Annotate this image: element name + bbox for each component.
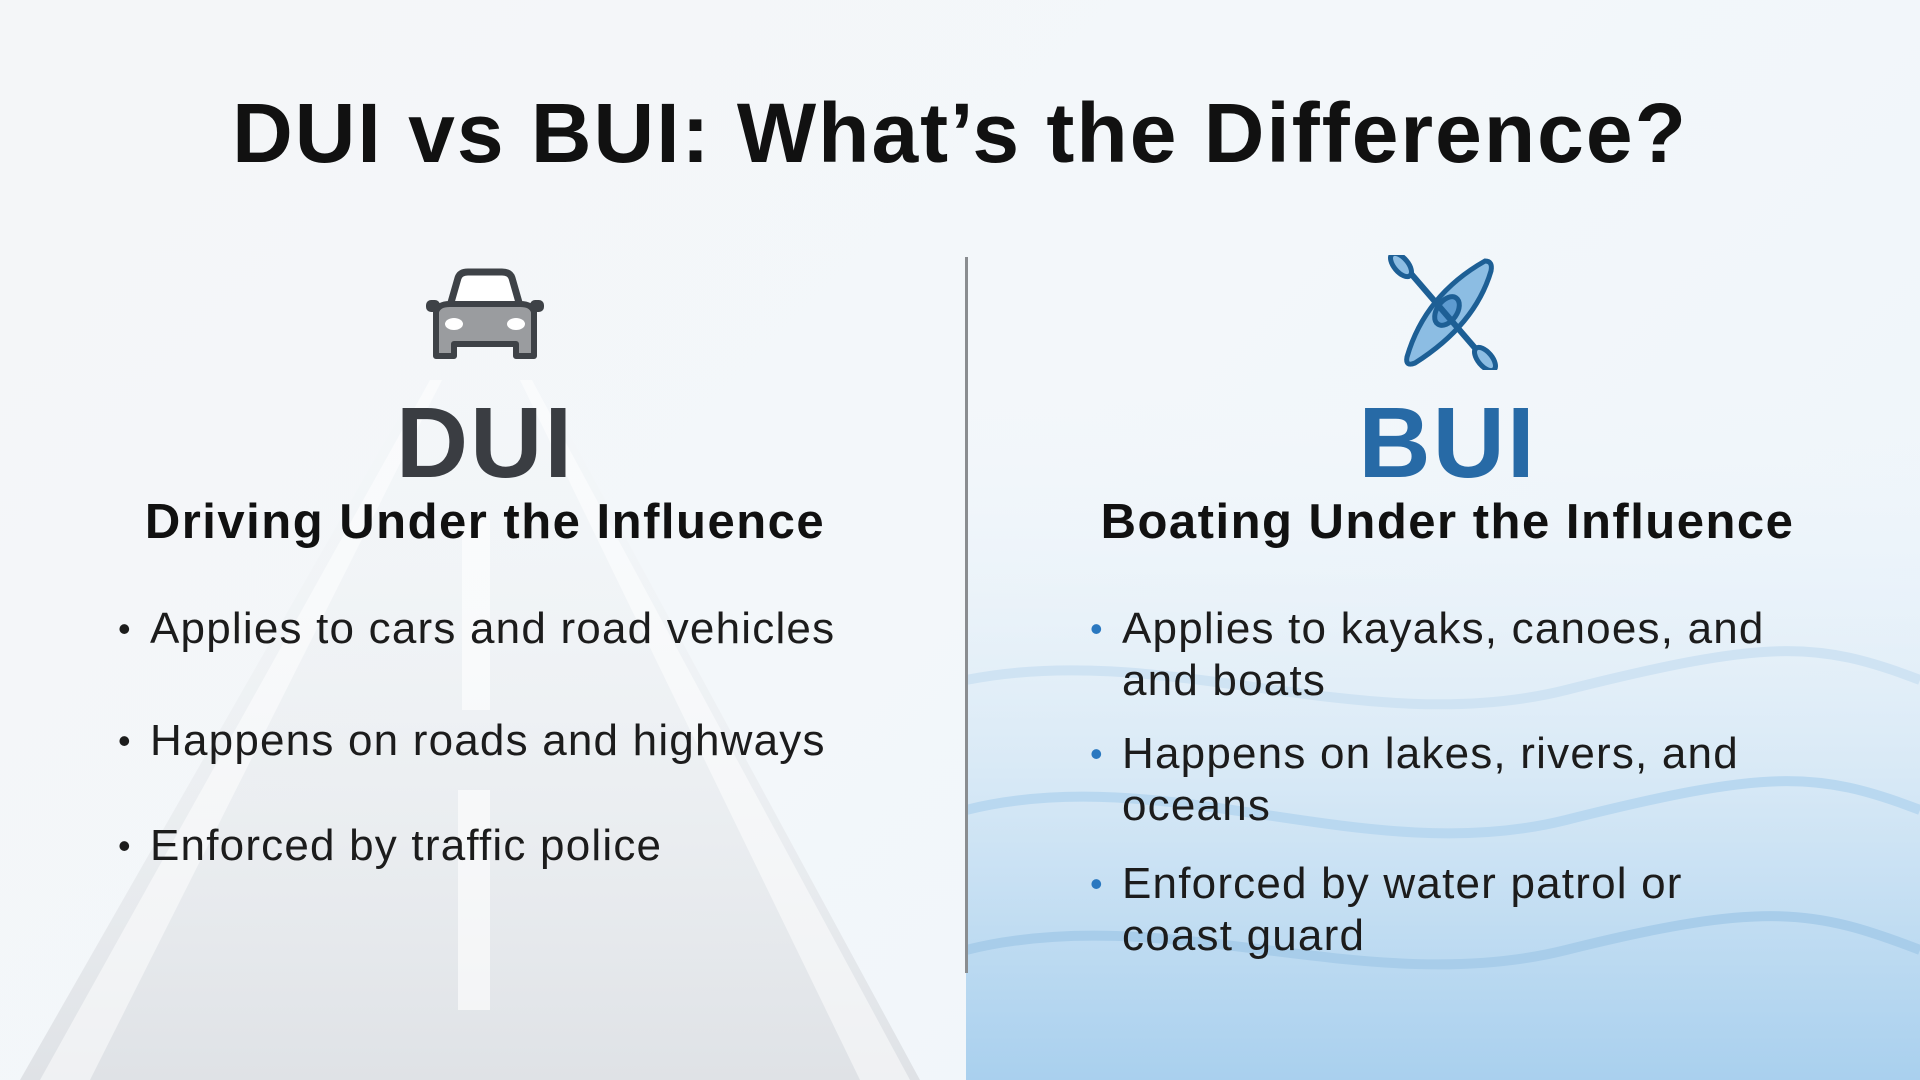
bullet list: • (118, 608, 132, 649)
bullet list: and boats (1122, 656, 1326, 705)
bullet list: • (118, 825, 132, 866)
icon: kayak (1388, 255, 1498, 370)
background: road (20, 778, 920, 1080)
heading: BUI: BUI (1358, 387, 1537, 499)
icon: car (426, 268, 544, 359)
bullet list (118, 604, 835, 870)
bullet list: • (1090, 863, 1104, 904)
panel: DUI (118, 268, 835, 870)
bullet list (1090, 604, 1765, 960)
heading: DUI: DUI (396, 387, 574, 499)
subtitle: Driving Under the Influence (145, 495, 825, 549)
bullet list: • (1090, 733, 1104, 774)
bullet list: coast guard (1122, 911, 1365, 960)
bullet list: Happens on lakes, rivers, and (1122, 729, 1739, 778)
bullet list: Enforced by traffic police (150, 821, 662, 870)
title: DUI vs BUI: What’s the Difference? (232, 86, 1688, 180)
subtitle: Boating Under the Influence (1101, 495, 1794, 549)
divider (965, 257, 968, 973)
bullet list: Happens on roads and highways (150, 716, 826, 765)
bullet list: Applies to cars and road vehicles (150, 604, 835, 653)
background: water (966, 590, 1920, 1080)
bullet list: oceans (1122, 781, 1271, 830)
bullet list: • (1090, 608, 1104, 649)
bullet list: • (118, 720, 132, 761)
bullet list: Enforced by water patrol or (1122, 859, 1683, 908)
panel: BUI (1090, 255, 1794, 960)
bullet list: Applies to kayaks, canoes, and (1122, 604, 1765, 653)
